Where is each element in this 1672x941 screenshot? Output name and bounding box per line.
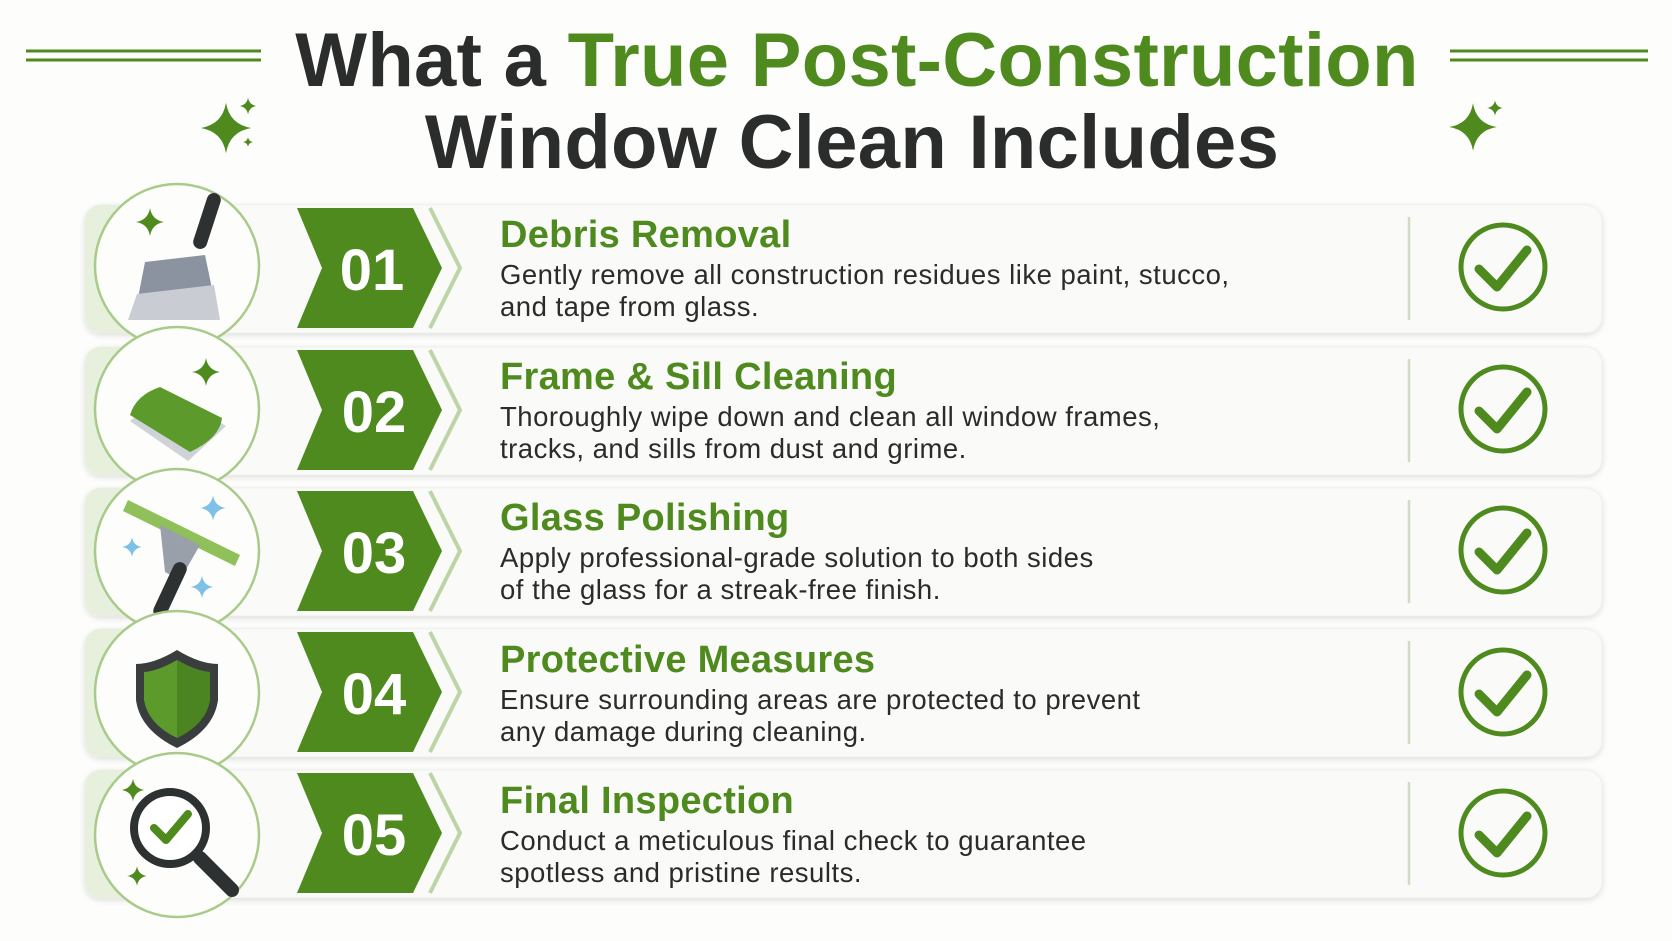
row 2 — [85, 327, 1602, 491]
text: glass polishing: Apply professional-grade solution to both sides — [500, 542, 1094, 573]
title: What a True Post-Construction — [295, 18, 1419, 103]
number chevron 03 — [297, 491, 460, 611]
number chevron 01: 01 — [340, 238, 404, 303]
text: debris removal: Gently remove all construction residues like paint, stucco, — [500, 259, 1230, 290]
row 1 — [85, 184, 1602, 348]
text: debris removal: and tape from glass. — [500, 291, 759, 322]
text: frame & sill: tracks, and sills from dust and grime. — [500, 433, 967, 464]
text: final inspection: Final Inspection — [500, 780, 794, 822]
number chevron 03: 03 — [342, 521, 406, 586]
text: frame & sill — [500, 356, 1160, 464]
icon: check 3 — [1461, 508, 1545, 592]
icon: sparkles left — [201, 98, 256, 153]
row 5 — [85, 753, 1602, 917]
title — [295, 18, 1419, 185]
text: frame & sill: Thoroughly wipe down and clean all window frames, — [500, 401, 1160, 432]
text: protective measures: Protective Measures — [500, 639, 875, 681]
icon: check 4 — [1461, 650, 1545, 734]
text: protective measures: Ensure surrounding areas are protected to prevent — [500, 684, 1141, 715]
icon: shield — [136, 650, 218, 748]
number chevron 02 — [297, 350, 460, 470]
icon: check 1 — [1461, 225, 1545, 309]
number chevron 04 — [297, 632, 460, 752]
icon: sparkles right — [1449, 100, 1503, 151]
row 4 — [85, 611, 1602, 775]
text: frame & sill: Frame & Sill Cleaning — [500, 356, 897, 398]
text: final inspection — [500, 780, 1087, 888]
number chevron 04: 04 — [342, 662, 406, 727]
text: debris removal: Debris Removal — [500, 214, 791, 256]
text: glass polishing — [500, 497, 1094, 605]
icon: sponge — [130, 358, 226, 461]
icon: check 2 — [1461, 367, 1545, 451]
text: final inspection: spotless and pristine results. — [500, 857, 862, 888]
text: protective measures: any damage during cleaning. — [500, 716, 867, 747]
number chevron 01 — [297, 208, 460, 328]
number chevron 05 — [297, 773, 460, 893]
icon: magnifier — [122, 779, 232, 890]
icon: squeegee — [122, 495, 240, 620]
text: glass polishing: Glass Polishing — [500, 497, 790, 539]
title: Window Clean Includes — [425, 100, 1279, 185]
text: debris removal — [500, 214, 1230, 322]
icon: scraper — [128, 191, 223, 320]
number chevron 05: 05 — [342, 803, 406, 868]
row 3 — [85, 469, 1602, 633]
text: glass polishing: of the glass for a streak-free finish. — [500, 574, 941, 605]
icon: check 5 — [1461, 791, 1545, 875]
text: final inspection: Conduct a meticulous final check to guarantee — [500, 825, 1087, 856]
number chevron 02: 02 — [342, 380, 406, 445]
text: protective measures — [500, 639, 1141, 747]
